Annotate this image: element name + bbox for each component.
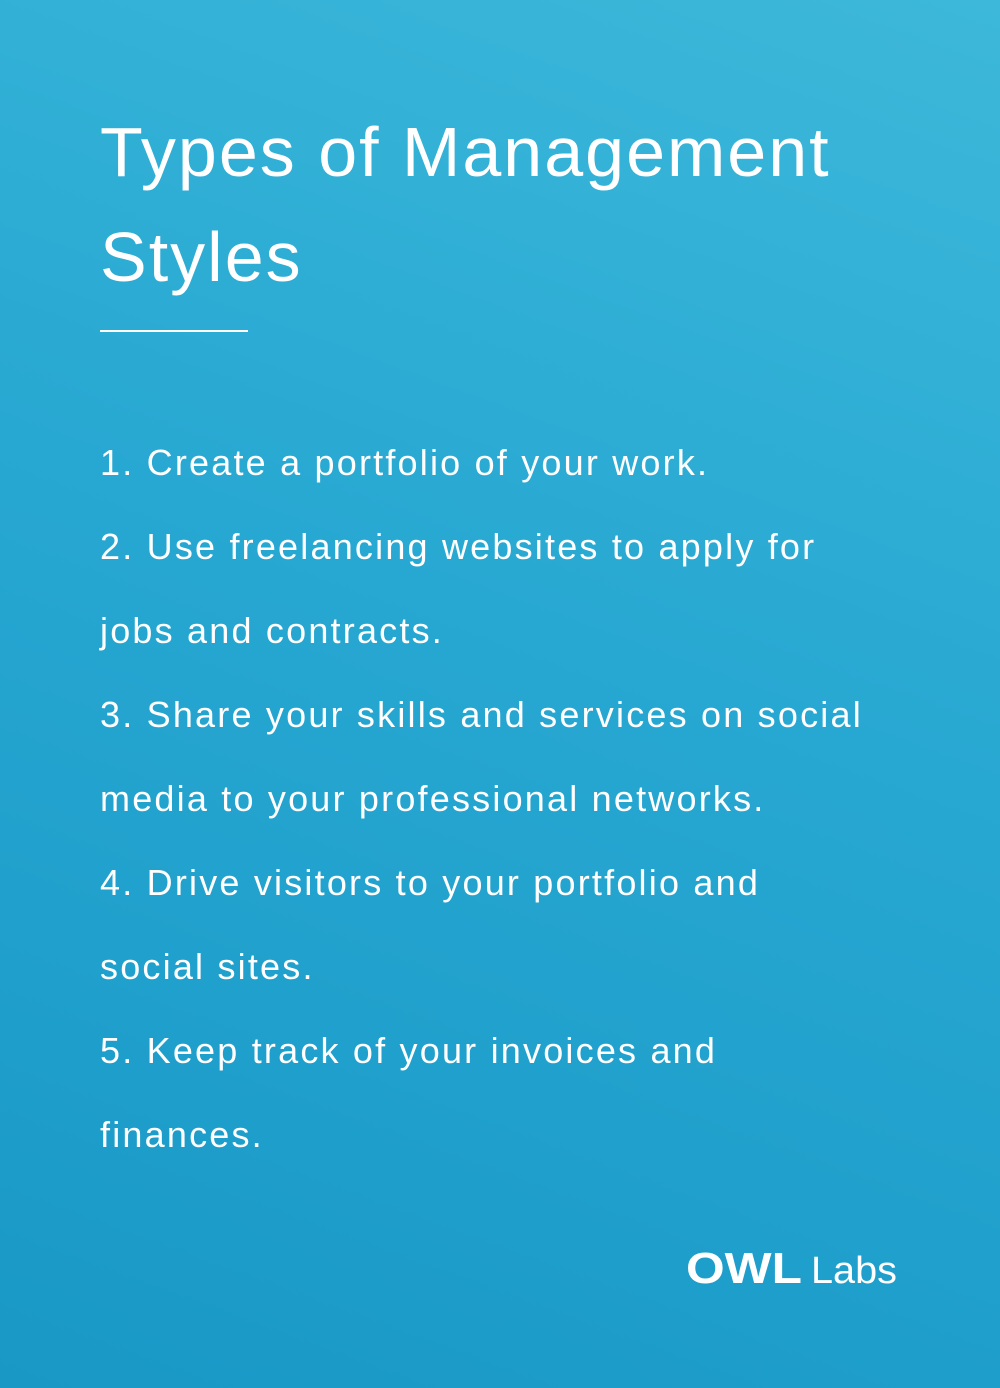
- logo: OWL Labs: [686, 1244, 897, 1291]
- list of steps: 5. Keep track of your invoices and: [100, 1030, 717, 1071]
- list of steps: 2. Use freelancing websites to apply for: [100, 526, 816, 567]
- title: [100, 113, 831, 296]
- list of steps: 4. Drive visitors to your portfolio and: [100, 862, 760, 903]
- list of steps: 1. Create a portfolio of your work.: [100, 442, 709, 483]
- logo: OWL Labs: Labs: [811, 1250, 897, 1291]
- list of steps: social sites.: [100, 946, 315, 987]
- title: Styles: [100, 218, 303, 296]
- list of steps: media to your professional networks.: [100, 778, 765, 819]
- title: Types of Management: [100, 113, 831, 191]
- list of steps: 3. Share your skills and services on social: [100, 694, 863, 735]
- list of steps: finances.: [100, 1114, 264, 1155]
- list of steps: jobs and contracts.: [100, 610, 444, 651]
- list of steps: [99, 442, 863, 1155]
